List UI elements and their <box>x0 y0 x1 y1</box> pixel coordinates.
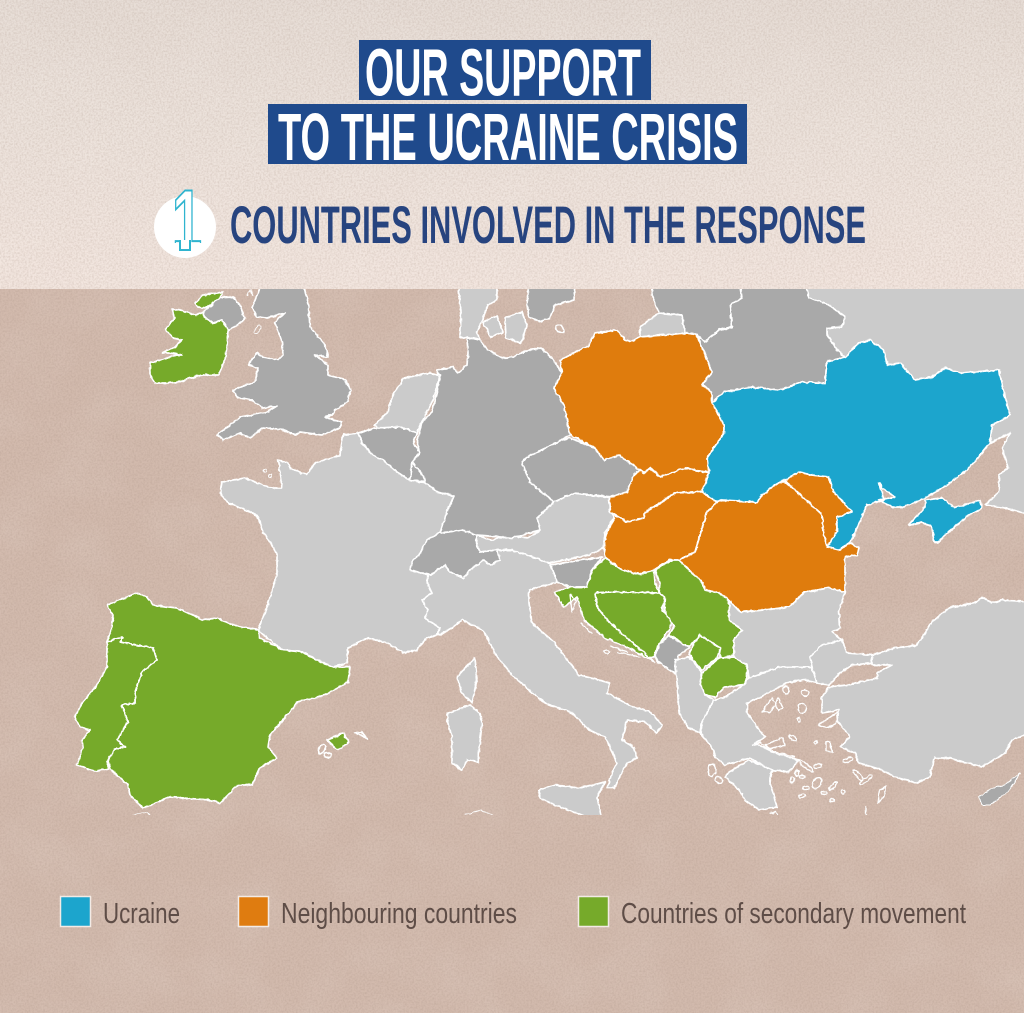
country: Moldova <box>785 472 852 547</box>
title line 2 <box>268 100 747 175</box>
country: Lithuania and Latvia <box>650 289 741 341</box>
country: Belgium <box>358 427 420 480</box>
legend item: Neighbouring countries <box>238 896 517 930</box>
country: Turkey <box>822 597 1024 783</box>
country: Kosovo <box>689 635 720 670</box>
country: North Macedonia <box>700 657 747 697</box>
islands: Channel and Irish Sea <box>247 289 272 478</box>
islands: Dalmatian coast <box>570 594 640 657</box>
country: Czechia <box>522 438 640 502</box>
country: Northern Ireland <box>203 297 245 330</box>
country: Albania <box>675 657 714 733</box>
country: Montenegro <box>655 635 689 673</box>
legend item: Neighbouring countries: Neighbouring countries <box>281 898 517 930</box>
title <box>268 36 747 175</box>
country: Portugal <box>75 637 157 771</box>
section number badge <box>154 190 216 258</box>
country: Luxembourg <box>410 462 425 482</box>
legend item: Ukraine: Ucraine <box>103 898 180 930</box>
country: Poland <box>554 330 724 477</box>
country: Ireland <box>150 292 228 383</box>
coast fragments: North Africa <box>132 810 492 816</box>
background: header band <box>0 0 1024 289</box>
country: European Turkey <box>810 640 872 685</box>
country: Sicily <box>539 782 605 820</box>
background: map sea <box>0 289 1024 1013</box>
island: Oland <box>554 324 565 334</box>
country: Romania <box>679 482 859 612</box>
country: Belarus <box>697 280 845 403</box>
country: Netherlands <box>375 373 440 433</box>
country: Spain <box>107 593 350 808</box>
country: Sardinia <box>447 705 482 770</box>
country: Switzerland <box>410 530 500 578</box>
title line 1 <box>359 36 651 110</box>
country: Bosnia and Herzegovina <box>595 592 672 657</box>
section number badge: 1 <box>172 173 202 269</box>
country: Slovakia <box>609 468 709 522</box>
title line 1: OUR SUPPORT <box>365 36 641 110</box>
legend item: Ukraine <box>60 896 180 930</box>
country: Denmark <box>458 280 527 343</box>
country: Slovenia <box>550 557 602 587</box>
country: Greece <box>700 667 817 772</box>
country: Ukraine <box>702 340 1010 550</box>
country: Russia <box>804 280 1024 514</box>
country: Germany <box>412 337 570 538</box>
country: Sweden <box>526 289 576 323</box>
country: Croatia <box>554 558 659 662</box>
country: Bulgaria <box>729 588 845 678</box>
region: Peloponnese <box>725 760 777 810</box>
country: Serbia <box>655 560 742 658</box>
region: Crimea <box>909 498 982 542</box>
country: Kaliningrad <box>640 313 685 337</box>
islands: Aegean <box>708 686 886 820</box>
country: Cyprus <box>979 773 1020 805</box>
country: Hungary <box>604 492 717 574</box>
country: Corsica <box>457 658 477 703</box>
country: France <box>220 433 454 667</box>
islands: Balearics <box>317 732 367 758</box>
country: Italy <box>410 550 662 788</box>
map of Europe <box>75 280 1024 820</box>
legend <box>60 896 966 930</box>
country: Austria <box>476 493 614 563</box>
country: Great Britain <box>217 280 351 440</box>
